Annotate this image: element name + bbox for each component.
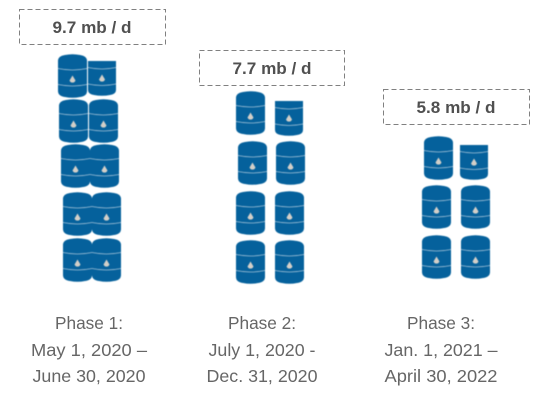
text: phase 1 dates: June 30, 2020 (32, 366, 146, 386)
icon: phase 2 barrels (236, 91, 305, 284)
panel: phase 2 (200, 50, 344, 386)
icon: phase 1 barrels (58, 54, 121, 282)
panel: phase 3 (384, 90, 530, 386)
panel: phase 1 (20, 10, 166, 386)
text: phase 3 dates (384, 313, 498, 386)
text: phase 3 dates: April 30, 2022 (384, 366, 498, 386)
callout: 9.7 mb / d (20, 10, 166, 44)
text: phase 1 dates: Phase 1: (55, 313, 123, 333)
callout: 7.7 mb / d: 7.7 mb / d (232, 60, 312, 78)
text: phase 2 dates: Phase 2: (228, 313, 296, 333)
text: phase 2 dates: July 1, 2020 - (208, 340, 316, 360)
text: phase 3 dates: Jan. 1, 2021 – (384, 340, 498, 360)
callout: 5.8 mb / d: 5.8 mb / d (416, 99, 496, 117)
callout: 7.7 mb / d (200, 50, 344, 86)
text: phase 1 dates (31, 313, 147, 386)
callout: 9.7 mb / d: 9.7 mb / d (52, 19, 132, 37)
icon: phase 3 barrels (422, 136, 490, 279)
text: phase 2 dates (206, 313, 318, 386)
callout: 5.8 mb / d (384, 90, 530, 124)
text: phase 2 dates: Dec. 31, 2020 (206, 366, 318, 386)
text: phase 3 dates: Phase 3: (407, 313, 475, 333)
text: phase 1 dates: May 1, 2020 – (31, 340, 147, 360)
